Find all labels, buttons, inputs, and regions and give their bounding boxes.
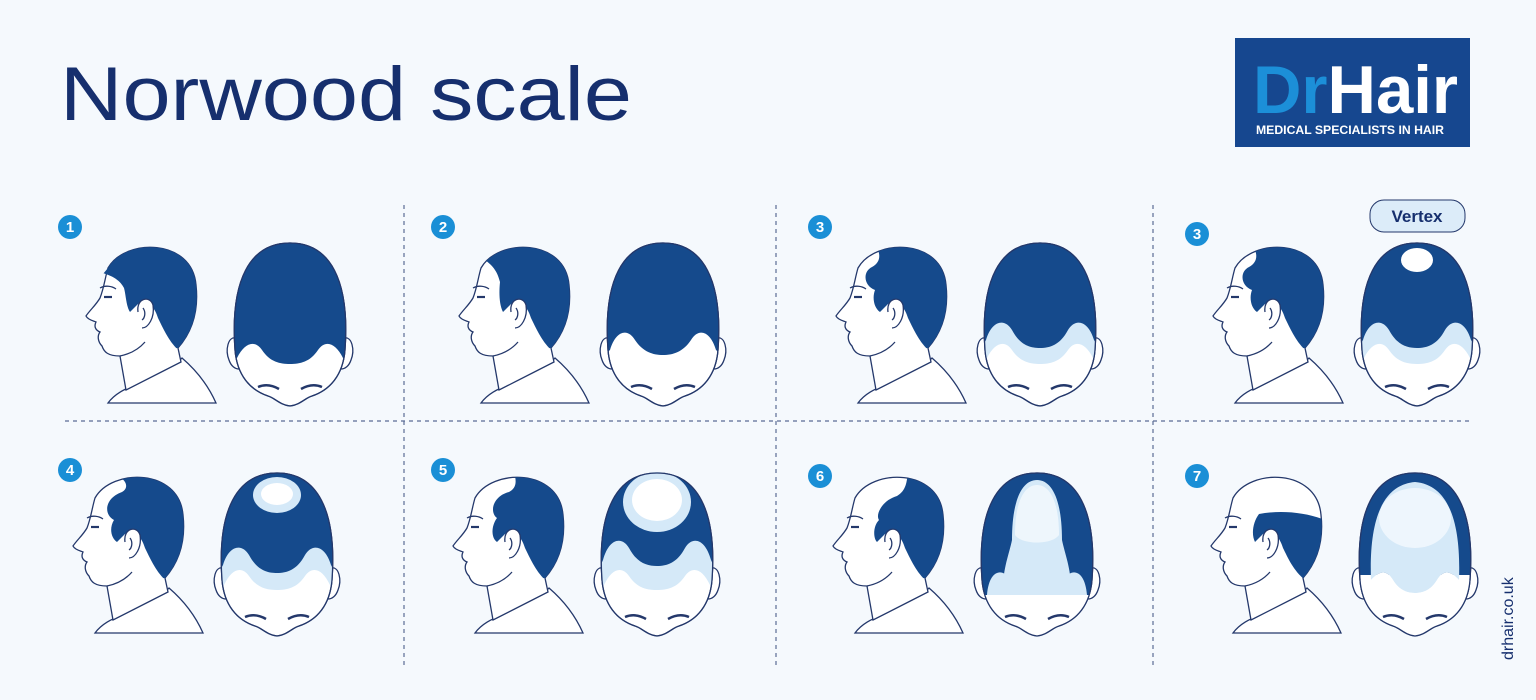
panel: stage 3 [835,242,1104,407]
website url: drhair.co.uk [1500,576,1517,660]
logo: DrHair [1235,38,1470,147]
panel: stage 5 [452,472,720,637]
badges [58,215,1209,488]
badges: 7 [1193,468,1201,485]
badges: 1 [66,219,74,236]
badges: 2 [439,219,447,236]
callout: Vertex: Vertex [1391,207,1443,226]
panel: stage 7 [1210,472,1478,637]
callout: Vertex [1370,200,1465,232]
logo: DrHair: DrHair [1253,52,1458,128]
panel: stage 6 [832,472,1100,637]
badges: 5 [439,462,447,479]
panel: stage 2 [458,242,726,407]
panel: stage 3 vertex [1212,242,1480,407]
badges: 4 [66,462,75,479]
title: Norwood scale [60,52,632,137]
logo: DrHair: MEDICAL SPECIALISTS IN HAIR [1256,123,1444,137]
panel: stage 4 [72,472,340,637]
badges: 3 [1193,226,1201,243]
badges: 6 [816,468,824,485]
badges: 3 [816,219,824,236]
panel: stage 1 [85,242,354,407]
